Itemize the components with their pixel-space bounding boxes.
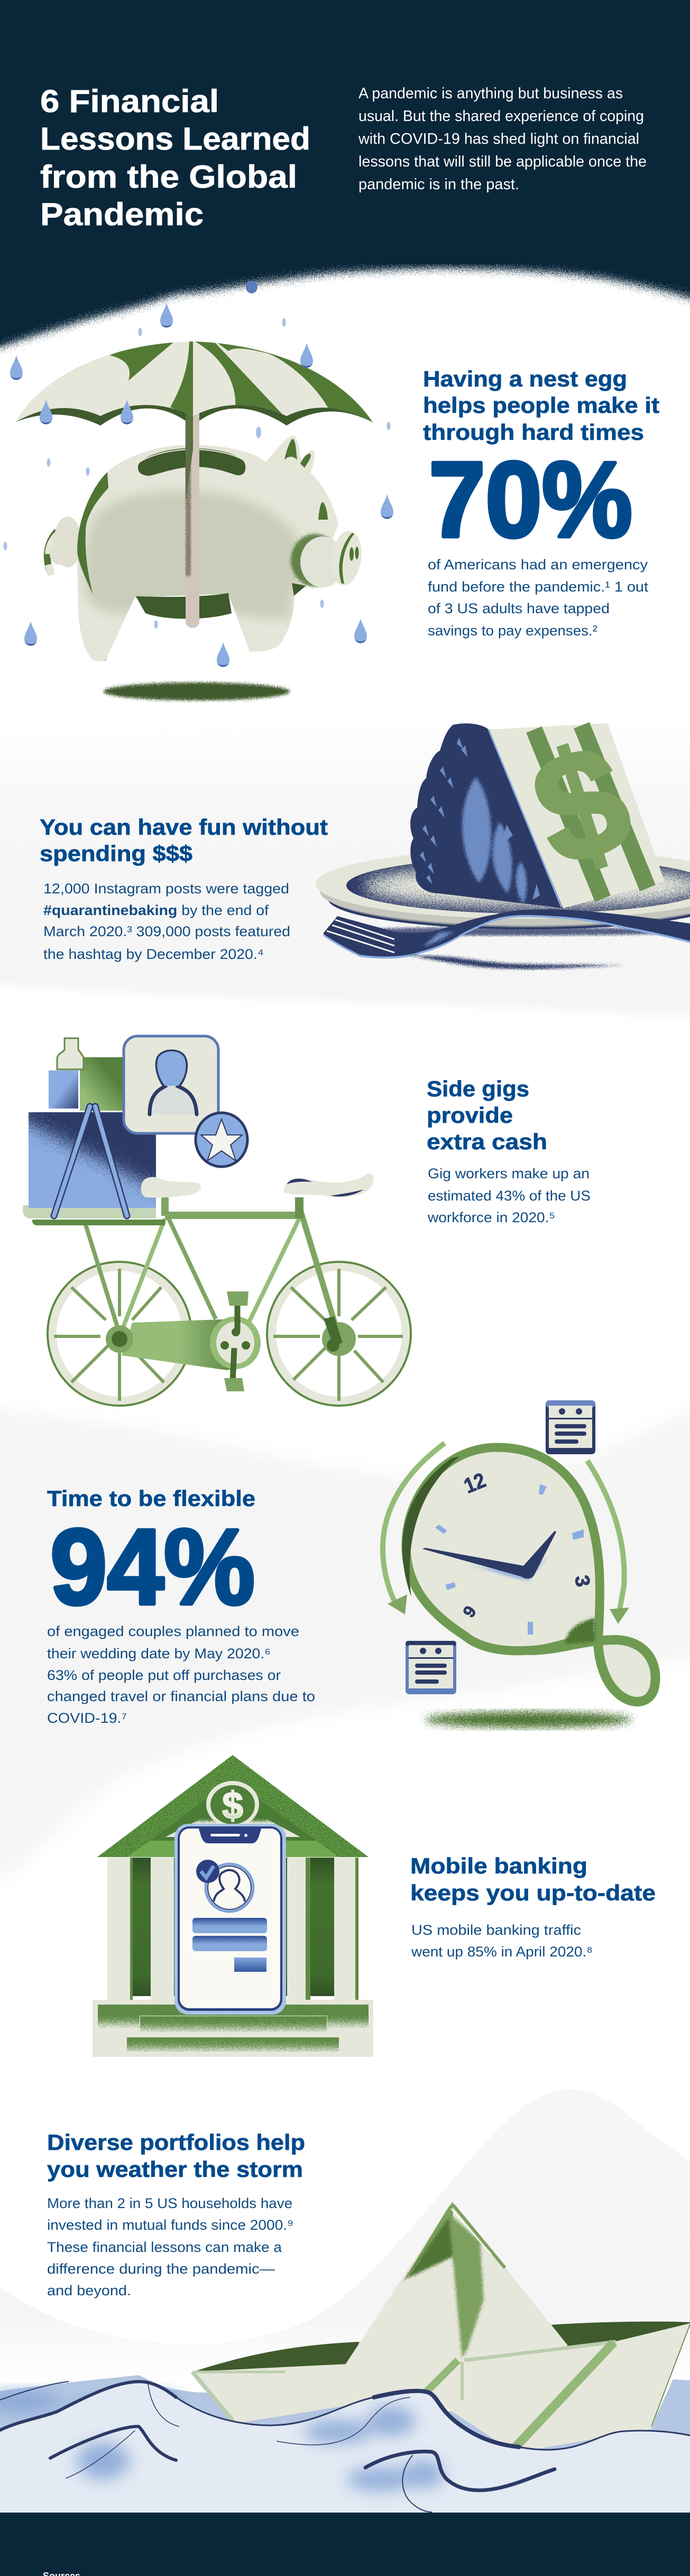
boat hull (191, 2323, 690, 2453)
clock shadow (425, 1712, 632, 1728)
heading: through hard times (423, 420, 644, 445)
clock loop (529, 1618, 656, 1702)
body text: estimated 43% of the US (428, 1188, 591, 1204)
title: 6 Financial (40, 84, 219, 119)
panel: dessert text (40, 815, 328, 962)
panel: bank with phone (79, 1755, 386, 2057)
wave outlines (0, 2381, 690, 2512)
heading (40, 815, 328, 866)
panel: background wash behind dessert section (0, 719, 690, 1018)
panel: melting clock (383, 1400, 656, 1728)
panel: footer (0, 2513, 690, 2576)
cake crust (410, 723, 563, 908)
columns (107, 1858, 358, 2000)
clock numbers and ticks: 12 (461, 1469, 489, 1498)
clock grain shade (566, 1618, 595, 1644)
roof coin (206, 1781, 259, 1827)
body text: went up 85% in April 2020.⁸ (411, 1944, 593, 1960)
plate shadow (333, 927, 682, 936)
body text: of engaged couples planned to move (47, 1623, 299, 1639)
roof coin: $ (222, 1785, 243, 1827)
wave shading (77, 2406, 444, 2491)
rear wheel (48, 1262, 191, 1406)
pig green crescent (77, 472, 108, 595)
front water (0, 2381, 690, 2514)
panel: side gigs text (427, 1076, 591, 1225)
panel: background wash behind clock section (0, 1396, 690, 1898)
umbrella canopy (16, 341, 373, 426)
handlebar (284, 1174, 374, 1197)
panel: background hill behind boat (0, 2090, 690, 2442)
chain guard (106, 1316, 356, 1370)
star badge (196, 1113, 247, 1167)
body text: March 2020.³ 309,000 posts featured (43, 924, 290, 939)
body text: fund before the pandemic.¹ 1 out (428, 579, 649, 595)
statistic 94%: 94% (50, 1507, 255, 1627)
panel: portfolios text (47, 2130, 305, 2298)
body text: 63% of people put off purchases or (47, 1667, 281, 1683)
heading: You can have fun without (40, 815, 328, 839)
heading: Side gigs (427, 1076, 529, 1101)
intro text (358, 85, 647, 193)
panel: header (0, 0, 690, 359)
phone bars (192, 1918, 267, 1933)
phone avatar (206, 1864, 253, 1912)
body text: changed travel or financial plans due to (47, 1688, 315, 1704)
pig belly (136, 593, 228, 597)
body text (427, 1166, 591, 1225)
dollar sign: $ (514, 710, 648, 900)
heading (423, 366, 659, 445)
heading (427, 1076, 547, 1154)
body text: COVID-19.⁷ (47, 1710, 127, 1726)
body text (43, 881, 290, 962)
bank base and steps (93, 2000, 373, 2057)
plate (316, 849, 690, 929)
title: Lessons Learned (40, 121, 310, 156)
front wheel (267, 1262, 411, 1406)
clock hands (422, 1531, 556, 1581)
bicycle frame (86, 1197, 339, 1346)
cake filling details (420, 737, 540, 904)
heading: provide (427, 1103, 513, 1128)
roof (97, 1755, 369, 1857)
clock edge shadow (402, 1456, 460, 1596)
body text (428, 557, 649, 639)
heading: helps people make it (423, 393, 659, 418)
intro text: usual. But the shared experience of coping (358, 108, 644, 125)
body text (47, 2195, 293, 2298)
pig coin slot (138, 448, 245, 476)
boat interior (196, 2322, 690, 2371)
body text: More than 2 in 5 US households have (47, 2195, 292, 2211)
clock numbers and ticks (459, 1469, 594, 1621)
phone notch (198, 1827, 262, 1843)
heading: you weather the storm (47, 2157, 303, 2182)
pig snout (291, 529, 365, 587)
umbrella pole (186, 412, 199, 628)
body text: their wedding date by May 2020.⁶ (47, 1646, 271, 1661)
saddle (141, 1177, 201, 1198)
panel: delivery bicycle (16, 1036, 411, 1406)
body text: of 3 US adults have tapped (428, 601, 610, 616)
body text: invested in mutual funds since 2000.⁹ (47, 2217, 293, 2233)
fork (323, 909, 690, 969)
right arrow (587, 1461, 629, 1624)
clock face (406, 1447, 600, 1651)
pig body (77, 445, 338, 661)
body text: and beyond. (47, 2283, 131, 2298)
profile card (124, 1036, 218, 1133)
body text: of Americans had an emergency (428, 557, 648, 573)
body text: #quarantinebaking by the end of (43, 902, 269, 918)
header background (0, 0, 690, 359)
heading (47, 2130, 305, 2182)
raindrops (3, 281, 393, 667)
body text (411, 1922, 593, 1960)
panel: piggy bank under umbrella (0, 281, 393, 700)
heading: extra cash (427, 1129, 547, 1154)
body text: US mobile banking traffic (411, 1922, 581, 1938)
heading: Diverse portfolios help (47, 2130, 305, 2155)
body text: the hashtag by December 2020.⁴ (43, 946, 264, 962)
body text: workforce in 2020.⁵ (427, 1209, 555, 1225)
footer background (0, 2513, 690, 2576)
body text: difference during the pandemic— (47, 2261, 275, 2277)
rack with boxes (16, 1038, 169, 1225)
pig belly behind legs (136, 593, 232, 619)
body text (47, 1623, 315, 1726)
left arrow (383, 1443, 445, 1614)
pig ear (263, 436, 315, 476)
calendar card top (546, 1400, 595, 1454)
body text: Gig workers make up an (428, 1166, 590, 1181)
panel: cake slice made of money on a plate (316, 710, 690, 969)
shadow under pig (104, 682, 290, 700)
panel: flexibility text (47, 1486, 315, 1726)
heading: keeps you up-to-date (410, 1880, 656, 1905)
body text: These financial lessons can make a (47, 2239, 282, 2255)
body text: savings to pay expenses.² (428, 623, 597, 639)
pig eye (318, 502, 328, 520)
intro text: A pandemic is anything but business as (358, 85, 623, 102)
clock numbers and ticks: 9 (459, 1602, 480, 1621)
boat sail (344, 2202, 568, 2366)
heading (410, 1853, 656, 1905)
title (40, 84, 310, 232)
title: Pandemic (40, 197, 204, 232)
panel: nest egg text (423, 366, 659, 639)
intro text: pandemic is in the past. (358, 176, 519, 193)
clock numbers and ticks: 3 (570, 1574, 594, 1589)
back water (0, 2375, 690, 2453)
intro text: with COVID-19 has shed light on financial (358, 131, 639, 147)
money slice (489, 710, 665, 908)
bottle (57, 1038, 84, 1069)
intro text: lessons that will still be applicable once the (358, 153, 647, 170)
piggy tail (47, 516, 81, 575)
phone check badge (196, 1860, 219, 1883)
phone (174, 1824, 286, 2015)
body text: 12,000 Instagram posts were tagged (43, 881, 289, 897)
crank and pedals (210, 1291, 261, 1391)
heading: Having a nest egg (423, 366, 627, 391)
panel: paper boat on waves (0, 2202, 690, 2514)
fork shadow (408, 956, 625, 969)
heading: Mobile banking (410, 1853, 587, 1878)
calendar card bottom (406, 1641, 456, 1694)
panel: mobile banking text (410, 1853, 656, 1960)
heading: Time to be flexible (47, 1486, 255, 1511)
statistic 70%: 70% (429, 440, 632, 560)
title: from the Global (40, 159, 297, 195)
heading: spending $$$ (40, 841, 192, 866)
